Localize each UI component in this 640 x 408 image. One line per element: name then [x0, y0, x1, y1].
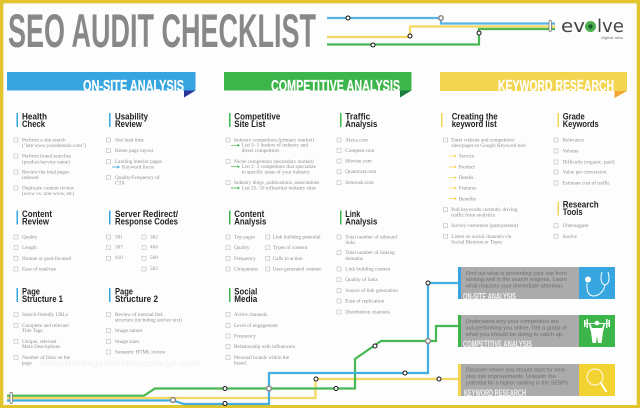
panel: creating the keyword list: keyword list — [452, 119, 497, 130]
panel: creating the keyword list: Survey customers (past/present) — [451, 222, 518, 229]
panel: page structure 1: Unique, relevant — [22, 339, 57, 345]
title: SEO AUDIT CHECKLIST — [8, 4, 316, 57]
panel: traffic analysis: Semrush.com — [345, 180, 374, 186]
panel: social media: brand — [234, 360, 246, 366]
panel: link analysis: Analysis — [345, 216, 377, 228]
panel: page structure 1: Search-friendly URLs — [22, 311, 68, 318]
panel: social media: Relationship with influencers — [234, 343, 295, 350]
panel: grade keywords: Value per conversion — [562, 170, 607, 176]
panel: creating the keyword list: Service — [459, 154, 475, 160]
banner: on-site analysis — [7, 72, 196, 98]
callout: keyword research: Discover where you should start for next- — [466, 368, 567, 374]
panel: health check: Review the total pages — [22, 170, 69, 176]
panel: link analysis: Quality of links — [345, 276, 378, 283]
panel: page structure 2: Page — [115, 286, 133, 297]
panel: link analysis: Link — [345, 209, 361, 220]
panel: link analysis: Ease of replication — [345, 298, 385, 304]
panel: competitive site list: direct competitors — [242, 148, 279, 154]
panel: health check: Check — [22, 119, 46, 130]
panel: content review: Length — [22, 245, 37, 251]
panel: creating the keyword list: traffic from analytics — [451, 212, 495, 218]
panel: usability review: Quality/Frequency of — [115, 174, 160, 181]
panel: competitive site list: List 2- 3 competitors that specialize — [242, 164, 317, 170]
panel: creating the keyword list: Features — [459, 186, 476, 192]
panel: health check: Health — [22, 112, 47, 123]
panel: content analysis: Analysis — [234, 216, 266, 228]
panel: competitive site list: List 3- 5 leaders of industry and — [242, 142, 308, 148]
panel: social media: Media — [234, 294, 258, 305]
callout: competitive analysis: out-performing you online. Get a grasp of — [466, 326, 567, 332]
evolve logo — [561, 16, 624, 40]
panel: content review: Ease of read/use — [22, 266, 57, 272]
panel: competitive site list: Industry competitors (primary market) — [234, 136, 314, 144]
panel: content review: Content — [22, 209, 53, 220]
panel: health check: indexed — [22, 175, 39, 181]
panel: page structure 2 — [106, 286, 182, 356]
icon: weightlifter — [584, 319, 610, 343]
bottom transit lines — [7, 281, 459, 406]
panel: page structure 1: Meta Descriptions — [22, 344, 60, 350]
panel: creating the keyword list: Pull keywords currently driving — [451, 207, 518, 213]
watermark: www.heritagechristiancollege.com — [39, 358, 200, 368]
panel: page structure 1: Complete and relevant — [22, 323, 70, 329]
panel: traffic analysis: Analysis — [345, 119, 377, 130]
callout: competitive analysis: what you should be doing to catch up. — [466, 332, 564, 338]
callout: keyword research: step site improvements. Unleash the — [466, 374, 556, 380]
evolve logo: ev — [561, 16, 585, 37]
panel: traffic analysis — [337, 112, 377, 186]
panel: grade keywords: Volume — [562, 148, 579, 154]
panel: health check: (www vs. non-www, etc) — [22, 190, 75, 197]
panel: content analysis: Types of content — [273, 244, 308, 251]
panel: creating the keyword list: Social Mention or Topsy — [451, 240, 503, 246]
panel: page structure 1 — [14, 286, 71, 366]
panel: content analysis: Frequency — [234, 256, 256, 262]
panel: content review: Human or goal-focused — [22, 255, 71, 262]
panel: content review — [14, 209, 71, 272]
panel: link analysis: Source of link generation — [345, 287, 398, 294]
panel: competitive site list: Niche competitors (secondary market) — [234, 158, 314, 165]
panel: page structure 2: Review of internal link — [115, 311, 163, 318]
panel: link analysis: Total number of linking — [345, 249, 395, 256]
panel: traffic analysis: Compete.com — [345, 148, 374, 154]
panel: health check — [14, 112, 86, 197]
panel: research tools: Research — [563, 200, 599, 210]
top transit lines — [327, 16, 555, 47]
panel: server redirect response codes — [106, 209, 178, 272]
panel: server redirect response codes: 404 — [150, 245, 158, 251]
panel: server redirect response codes: 301 — [115, 234, 123, 240]
panel: usability review: Site load time — [115, 138, 145, 144]
panel: page structure 1: Page — [22, 286, 40, 297]
callout: on-site analysis — [458, 267, 615, 302]
panel: content review: Review — [22, 216, 49, 228]
panel: grade keywords: Estimate cost of traffic — [562, 180, 610, 186]
callout: on-site analysis: what requires your immediate attention. — [466, 284, 564, 290]
panel: server redirect response codes: 503 — [150, 266, 158, 272]
panel: link analysis: domains — [345, 256, 363, 262]
icon: stethoscope — [586, 272, 609, 296]
callout: competitive analysis — [458, 315, 615, 349]
panel: usability review: Home page layout — [115, 148, 154, 154]
panel: usability review — [106, 112, 162, 186]
panel: competitive site list: in specific areas of your industry — [242, 168, 310, 176]
panel: server redirect response codes: 500 — [150, 255, 158, 261]
panel: creating the keyword list: sites/pages to Google Keyword tool — [451, 143, 526, 149]
panel: social media: Social — [234, 286, 257, 297]
panel: creating the keyword list: Creating the — [452, 112, 498, 123]
panel: page structure 2: Structure 2 — [115, 294, 158, 305]
callout: competitive analysis: COMPETITIVE ANALYSIS — [463, 339, 532, 349]
panel: social media: Level of engagement — [234, 322, 278, 329]
panel: link analysis: Total number of inbound — [345, 234, 397, 240]
panel: grade keywords: Relevance — [562, 138, 585, 144]
panel: content analysis: Uniqueness — [234, 266, 258, 272]
panel: traffic analysis: Alexa.com — [345, 138, 368, 144]
panel: creating the keyword list — [441, 112, 526, 246]
callout: on-site analysis: Find out what is preventing your site from — [466, 271, 567, 277]
panel: creating the keyword list: Benefits — [459, 196, 476, 202]
panel: link analysis — [337, 209, 398, 316]
panel: traffic analysis: Traffic — [345, 112, 370, 123]
panel: content analysis: Content — [234, 209, 265, 220]
panel: health check: Duplicate content review — [22, 186, 74, 192]
panel: social media: Frequency — [234, 334, 256, 340]
panel: usability review: Review — [115, 119, 142, 130]
panel: content analysis: Calls to action — [273, 256, 303, 262]
panel: page structure 2: Semantic HTML review — [115, 350, 166, 356]
panel: traffic analysis: Hitwise.com — [345, 158, 372, 164]
panel: traffic analysis: Quantcast.com — [345, 169, 376, 175]
panel: competitive site list — [226, 112, 319, 192]
panel: usability review: Usability — [115, 112, 149, 123]
panel: health check: ("site:www.yourdomain.com") — [22, 142, 86, 149]
panel: health check: Perform brand searches — [22, 152, 71, 160]
panel: grade keywords: Difficulty (organic, paid) — [562, 158, 615, 166]
callout: competitive analysis: Understand why your competitors are — [466, 319, 559, 325]
icon: magnifying glass — [587, 369, 606, 392]
evolve logo: digital labs — [601, 35, 623, 40]
panel: social media: Personal brands within the — [234, 355, 290, 361]
panel: page structure 1: Number of links on the — [22, 354, 71, 361]
panel: research tools: Ubersuggest — [562, 223, 589, 229]
callout: keyword research: KEYWORD RESEARCH — [464, 388, 526, 398]
panel: competitive site list: List 25- 50 influential industry sites — [242, 184, 316, 192]
callout: keyword research: potential for a higher ranking in the SERPs. — [466, 380, 570, 386]
panel: usability review: CTA — [115, 180, 125, 186]
panel: page structure 2: Image names — [115, 328, 143, 334]
panel: server redirect response codes: 410 — [115, 255, 123, 261]
panel: content analysis: User-generated content — [273, 266, 321, 272]
panel: usability review: Landing interior pages — [115, 159, 162, 165]
panel: content analysis: Top pages — [234, 234, 255, 240]
panel: page structure 1: page — [22, 360, 32, 366]
panel: competitive site list: Industry blogs, publications, associations — [234, 180, 319, 186]
panel: competitive site list: Site List — [234, 119, 266, 130]
panel: research tools: Tools — [563, 207, 583, 218]
banner: on-site analysis: ON-SITE ANALYSIS — [83, 78, 184, 95]
panel: server redirect response codes: Response Codes — [115, 216, 178, 228]
panel: health check: (product/service name) — [22, 158, 70, 166]
panel: creating the keyword list: Product — [459, 164, 475, 170]
panel: social media: Active channels — [234, 312, 267, 318]
panel: research tools — [554, 200, 599, 240]
panel: content review: Quality — [22, 234, 38, 240]
panel: creating the keyword list: Details — [459, 175, 473, 181]
banner: competitive analysis — [224, 72, 412, 98]
panel: usability review: Keyword focus — [122, 164, 154, 170]
panel: grade keywords — [554, 112, 615, 186]
panel: health check: Perform a site search — [22, 136, 66, 144]
panel: grade keywords: Keywords — [563, 119, 599, 130]
panel: page structure 2: Image sizes — [115, 339, 139, 345]
panel: server redirect response codes: 302 — [150, 234, 158, 240]
panel: content analysis — [226, 209, 321, 272]
panel: creating the keyword list: Listen on social channels via — [451, 234, 512, 240]
panel: page structure 1: Structure 1 — [22, 294, 64, 305]
banner: keyword research — [440, 72, 627, 98]
panel: page structure 1: Title Tags — [22, 328, 43, 334]
panel: content analysis: Quality — [234, 245, 250, 251]
panel: link analysis: links — [345, 240, 355, 246]
evolve logo: lve — [597, 16, 624, 37]
callout: on-site analysis: ON-SITE ANALYSIS — [463, 292, 516, 302]
panel: competitive site list: Competitive — [234, 112, 280, 123]
callout: on-site analysis: ranking well in the search engines. Learn — [466, 277, 567, 283]
panel: content analysis: Link building potential — [273, 234, 321, 240]
panel: research tools: Soolve — [562, 234, 578, 240]
banner: competitive analysis: COMPETITIVE ANALYSIS — [271, 78, 400, 95]
panel: server redirect response codes: Server Redirect/ — [115, 209, 178, 220]
panel: link analysis: Distribution channels — [345, 310, 390, 316]
panel: server redirect response codes: 307 — [115, 245, 123, 251]
panel: social media — [226, 286, 295, 366]
panel: page structure 2: structure (including anchor text) — [115, 316, 182, 324]
panel: grade keywords: Grade — [563, 112, 585, 123]
callout: keyword research — [458, 364, 615, 398]
panel: creating the keyword list: Enter website and competitors' — [451, 138, 515, 144]
panel: link analysis: Link building content — [345, 266, 391, 272]
